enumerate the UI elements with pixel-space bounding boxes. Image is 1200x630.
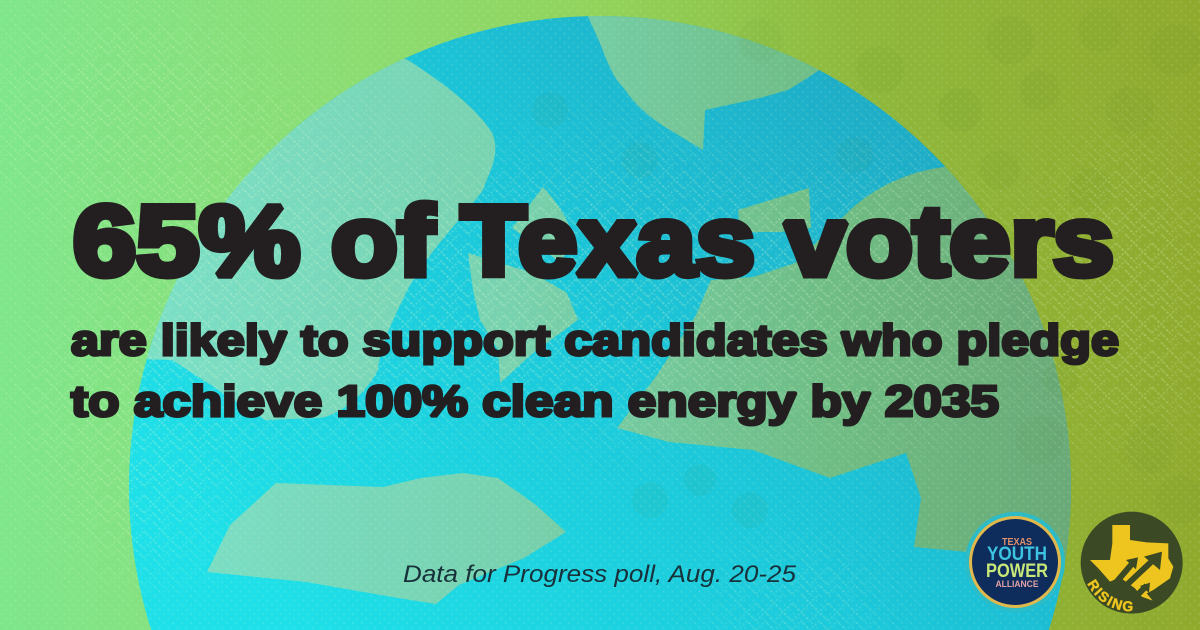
headline (73, 185, 1114, 296)
land: central island (468, 253, 578, 383)
logo: Texas Youth Power Alliance: ALLIANCE (996, 579, 1038, 590)
halftone dots (532, 8, 1200, 528)
land: central island peak (512, 187, 570, 259)
subheading line 2: to achieve 100% clean energy by 2035 (71, 377, 999, 426)
label: Rising (1087, 583, 1135, 611)
icon: Texas shape (1090, 525, 1173, 601)
land: bottom continent (207, 473, 566, 604)
land: small notch island (738, 188, 811, 232)
logo: Rising: RISING (1087, 578, 1133, 612)
logo: Texas Youth Power Alliance: TEXAS (1002, 537, 1032, 548)
source note: Data for Progress poll, Aug. 20-25 (403, 561, 797, 588)
headline: voters (785, 185, 1114, 296)
icon: rising arrows (1117, 557, 1156, 595)
logo: Texas Youth Power Alliance: POWER (986, 561, 1048, 582)
headline: of (331, 185, 435, 296)
land: top continent (588, 16, 819, 150)
logo: Texas Youth Power Alliance (965, 512, 1065, 612)
logo: Texas Youth Power Alliance: YOUTH (987, 544, 1047, 565)
land: right continent (617, 167, 1071, 561)
headline: Texas (461, 185, 755, 296)
subheading line 1: are likely to support candidates who pledge (71, 316, 1119, 365)
headline: 65% (73, 185, 300, 296)
land: upper-left continent (146, 58, 496, 420)
logo: Rising (1080, 512, 1183, 614)
